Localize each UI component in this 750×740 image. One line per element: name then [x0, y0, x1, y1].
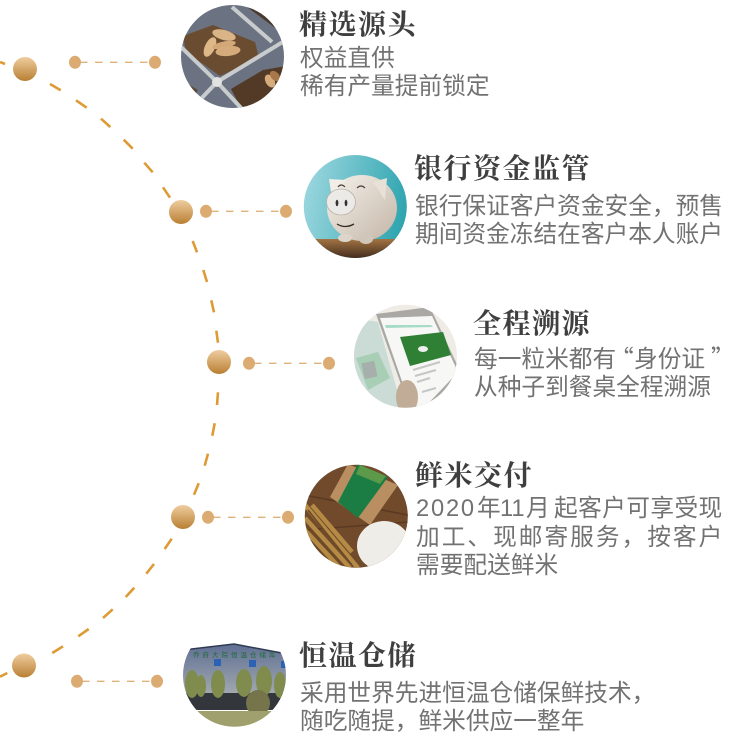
dashed curve — [0, 62, 218, 677]
text: 2020年11月 — [416, 495, 724, 579]
connector 5 — [71, 675, 163, 688]
photo: seeds in tray — [178, 4, 286, 110]
text: 权益直供: 权益直供 — [300, 45, 395, 72]
text: 每一粒米: 身份证 — [634, 346, 705, 373]
node 4 — [171, 505, 195, 529]
text: 每一粒米: ” — [711, 340, 735, 374]
text: 2020年11月: 需要配送鲜米 — [416, 552, 558, 579]
text: 2020年11月: 年 — [477, 495, 501, 522]
node 2 — [169, 200, 193, 224]
connector 2 — [200, 205, 292, 218]
text: 每一粒米: “ — [610, 340, 634, 374]
photo: warehouse — [183, 643, 286, 727]
text: 权益直供: 稀有产量提前锁定 — [300, 73, 490, 100]
text: 每一粒米: 每一粒米都有 — [474, 347, 616, 373]
text: 每一粒米 — [474, 340, 735, 401]
node 3 — [207, 350, 231, 374]
text: 每一粒米: 从种子到餐桌全程溯源 — [474, 374, 711, 401]
connector 4 — [202, 511, 294, 524]
text: 2020年11月: 2020 — [416, 496, 476, 522]
connector 1 — [69, 56, 161, 69]
text: 银行保证: 银行保证客户资金安全，预售 — [415, 193, 723, 220]
photo: phone traceability — [354, 304, 457, 408]
text: 2020年11月: 月 — [526, 496, 550, 522]
connector 3 — [243, 357, 335, 370]
node 5 — [12, 654, 36, 678]
photo: piggy bank — [303, 154, 408, 260]
text: 2020年11月: 加工、现邮寄服务，按客户 — [416, 524, 724, 551]
title: 银行资金监管: 银行资金监管 — [414, 153, 591, 185]
text: 2020年11月: 起客户可享受现 — [554, 495, 723, 522]
title: 恒温仓储: 恒温仓储 — [299, 640, 417, 672]
node 1 — [13, 57, 37, 81]
text: 银行保证 — [415, 193, 723, 248]
text: 权益直供 — [300, 45, 490, 100]
title: 精选源头: 精选源头 — [299, 8, 419, 41]
title: 全程溯源: 全程溯源 — [473, 308, 592, 340]
text: 2020年11月: 11 — [500, 496, 525, 522]
text: 采用世界 — [300, 680, 655, 735]
photo: warehouse: 乔府大院恒温仓储库 — [193, 650, 278, 659]
text: 采用世界: 随吃随提，鲜米供应一整年 — [300, 708, 584, 735]
photo: rice bag — [304, 464, 411, 571]
text: 银行保证: 期间资金冻结在客户本人账户 — [415, 221, 723, 248]
text: 采用世界: 采用世界先进恒温仓储保鲜技术， — [300, 680, 655, 707]
title: 鲜米交付: 鲜米交付 — [415, 460, 533, 492]
